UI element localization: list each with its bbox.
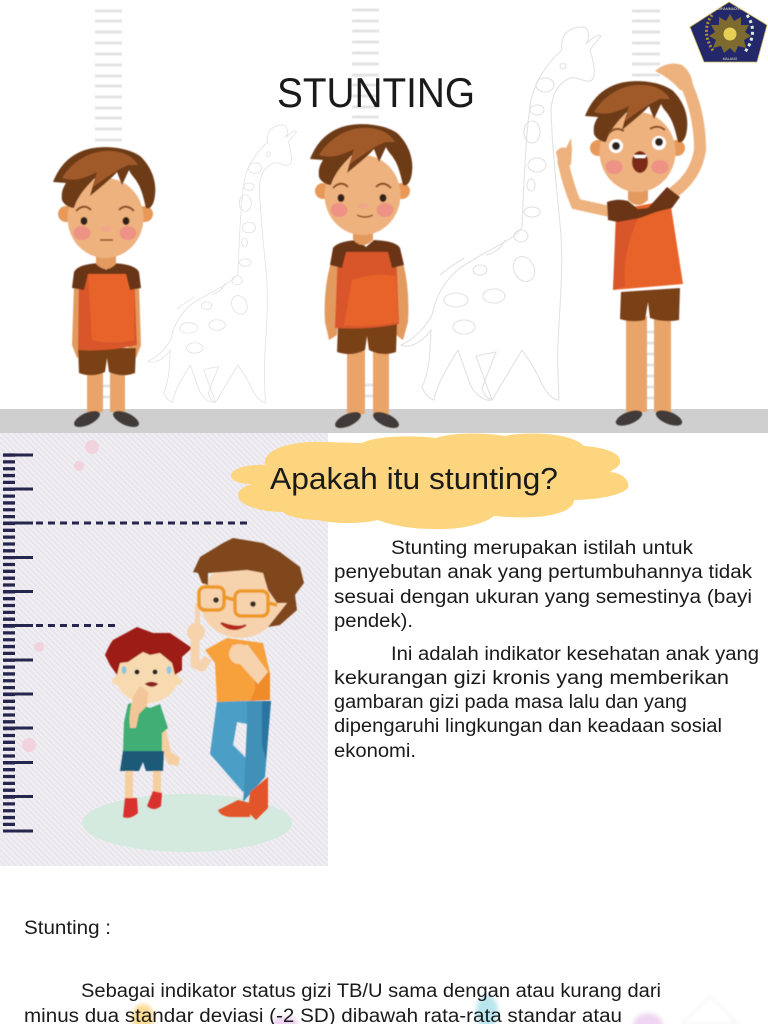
pink dots: [22, 440, 99, 752]
boy: shortest: [53, 147, 155, 430]
logo: university emblem: MALANG: [723, 57, 738, 61]
text block: definition: sesuai dengan ukuran yang semestinya (bayi: [334, 587, 752, 608]
ground ellipse: [82, 794, 292, 852]
text block: definition: [334, 538, 759, 762]
logo: university emblem: [690, 2, 767, 62]
text block: definition: penyebutan anak yang pertumbuhannya tidak: [334, 562, 753, 583]
boy: middle: [310, 124, 412, 431]
text block: definition: pendek).: [334, 611, 413, 632]
text block: definition: ekonomi.: [334, 741, 416, 762]
cloud heading: Apakah itu stunting?: [270, 461, 558, 496]
logo: university emblem: MUHAMMADIYAH: [716, 7, 745, 11]
short boy: [105, 627, 192, 818]
emblem star: [709, 14, 751, 53]
floor band: [0, 409, 768, 433]
text block: definition: Ini adalah indikator kesehatan anak yang: [391, 644, 759, 665]
pastel decorations bottom: [132, 995, 738, 1024]
title: STUNTING: [277, 69, 475, 116]
panel: tall and short boy illustration: [0, 433, 328, 866]
text block: definition: gambaran gizi pada masa lalu dan yang: [334, 692, 687, 713]
cloud callout: [231, 433, 628, 529]
height chart rulers: [95, 10, 660, 398]
giraffe outline right: [401, 27, 601, 400]
text block: stunting indicator: Sebagai indikator status gizi TB/U sama dengan atau kurang dari: [81, 981, 661, 1002]
panel: height comparison illustration: [0, 10, 768, 433]
measuring ruler: [3, 453, 33, 832]
boy: tallest, arm raised: [556, 63, 700, 429]
dashed height markers: [36, 523, 247, 626]
hatched backdrop: [0, 433, 328, 866]
text block: definition: Stunting merupakan istilah untuk: [391, 538, 694, 559]
text block: definition: dipengaruhi lingkungan dan keadaan sosial: [334, 716, 722, 737]
text block: stunting indicator: Stunting :: [24, 918, 111, 939]
text block: definition: kekurangan gizi kronis yang memberikan: [334, 668, 729, 689]
giraffe outline left: [148, 125, 297, 402]
tall boy with glasses: [187, 538, 304, 820]
text block: stunting indicator: [24, 918, 661, 1024]
